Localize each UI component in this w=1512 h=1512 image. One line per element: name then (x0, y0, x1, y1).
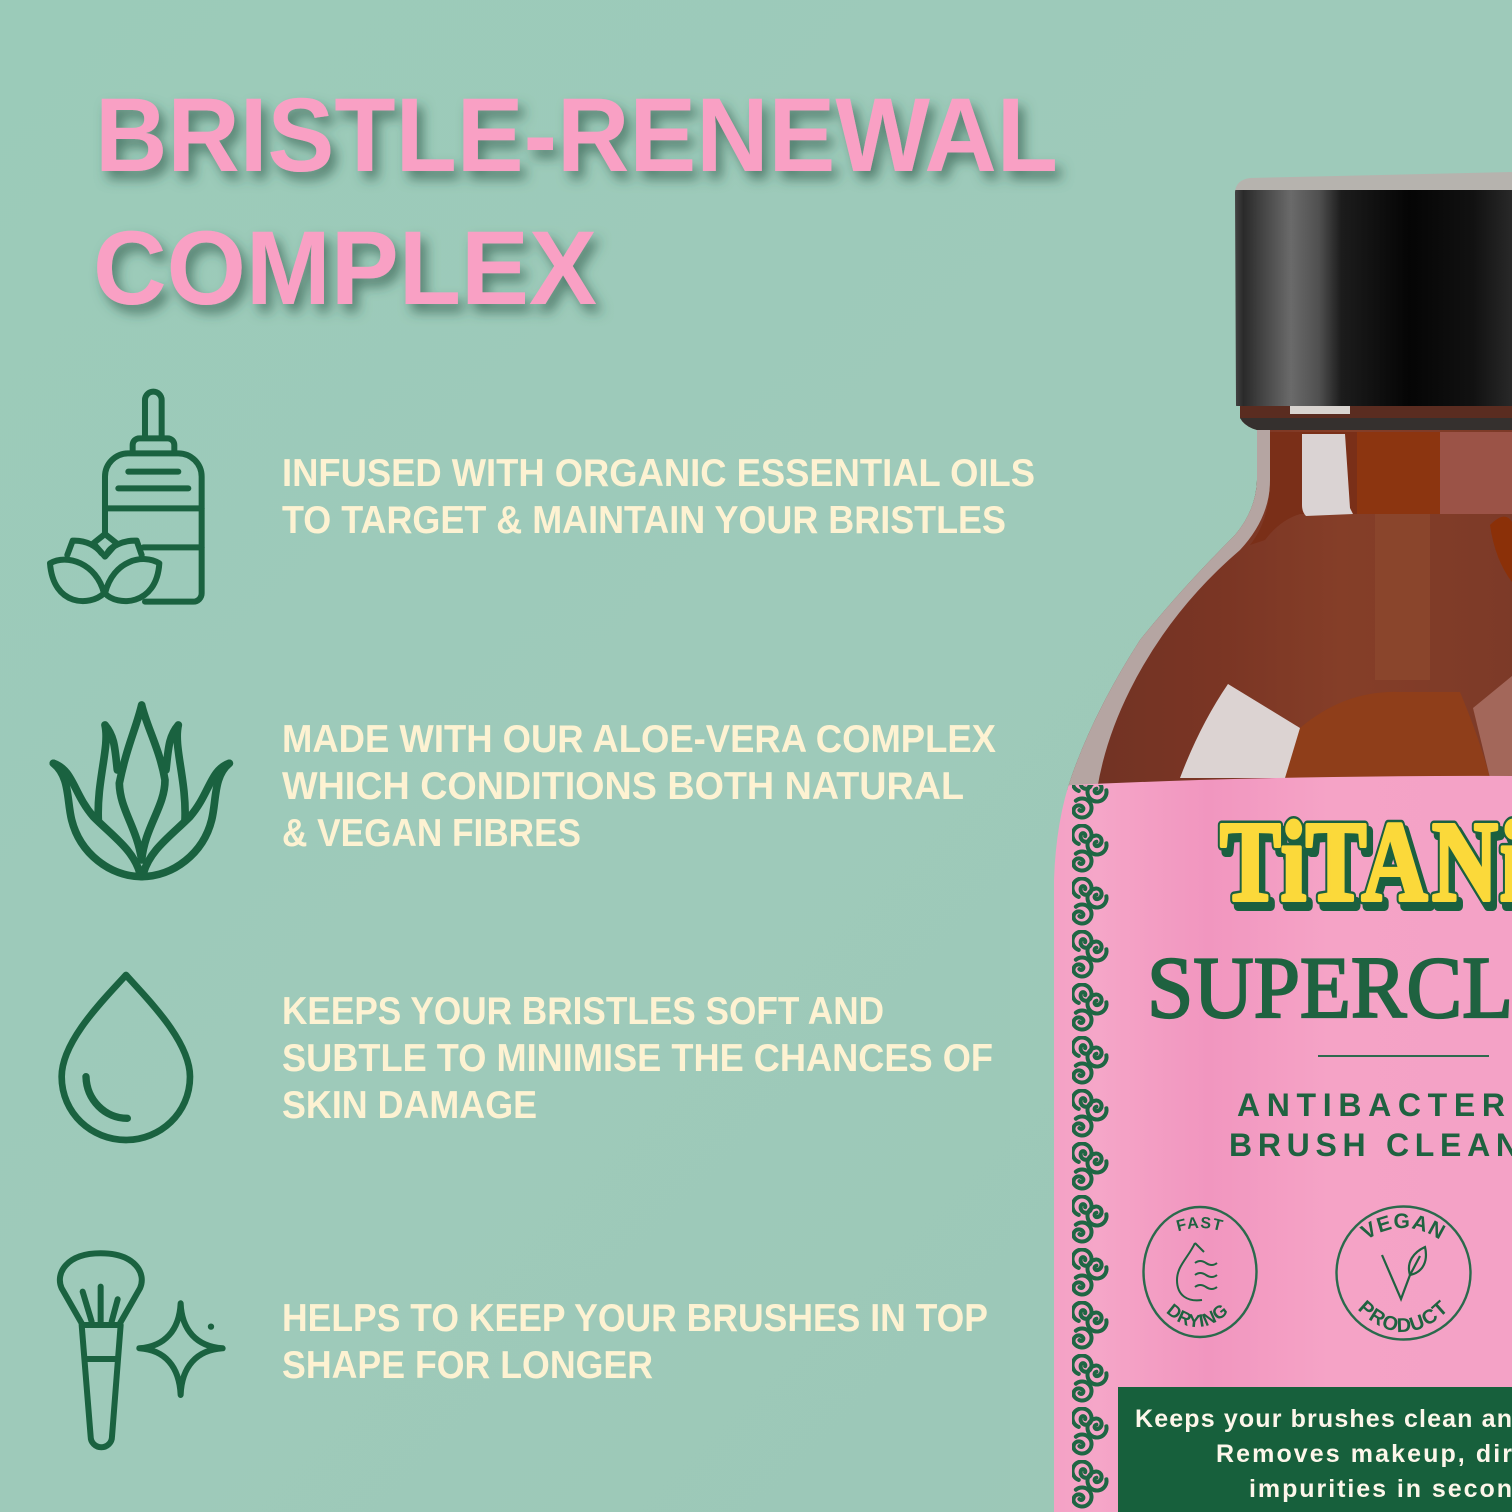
title (93, 77, 1058, 327)
badge: vegan product: PRODUCT (1358, 1300, 1446, 1332)
product descriptor: BRUSH CLEAN (1229, 1127, 1512, 1163)
badge: vegan product (1335, 1205, 1472, 1341)
icon: water drop (62, 975, 190, 1140)
title: COMPLEX (93, 210, 597, 327)
text: soft bristles: SKIN DAMAGE (282, 1084, 537, 1127)
product descriptor: ANTIBACTER (1237, 1087, 1505, 1123)
text: soft bristles (282, 990, 993, 1127)
green claim box: Removes makeup, dir (1216, 1440, 1512, 1468)
text: brush shape: HELPS TO KEEP YOUR BRUSHES IN TOP (282, 1297, 988, 1340)
title: BRISTLE-RENEWAL (95, 77, 1058, 194)
icon: aloe vera (53, 705, 229, 877)
icon: makeup brush with sparkle (60, 1253, 223, 1447)
text: aloe vera: MADE WITH OUR ALOE-VERA COMPLEX (282, 718, 996, 761)
green claim box (1118, 1387, 1512, 1512)
badge: vegan product: VEGAN (1359, 1213, 1446, 1239)
text: essential oils (282, 452, 1035, 542)
text: brush shape (282, 1297, 988, 1387)
green claim box: impurities in secon (1249, 1475, 1512, 1503)
text: soft bristles: SUBTLE TO MINIMISE THE CHANCES OF (282, 1037, 993, 1080)
text: brush shape: SHAPE FOR LONGER (282, 1344, 653, 1387)
badge: fast drying (1142, 1206, 1258, 1338)
text: essential oils: TO TARGET & MAINTAIN YOUR BRISTLES (282, 499, 1006, 542)
green claim box: Keeps your brushes clean an (1135, 1405, 1512, 1433)
amber glass (1050, 420, 1512, 790)
label (1054, 776, 1512, 1512)
text: essential oils: INFUSED WITH ORGANIC ESSENTIAL OILS (282, 452, 1035, 495)
text: aloe vera: & VEGAN FIBRES (282, 812, 581, 855)
text: aloe vera: WHICH CONDITIONS BOTH NATURAL (282, 765, 964, 808)
icon: essential oil bottle with lotus (50, 392, 202, 602)
badge: fast drying: FAST (1176, 1217, 1224, 1232)
text: soft bristles: KEEPS YOUR BRISTLES SOFT AND (282, 990, 884, 1033)
text: aloe vera (282, 718, 996, 855)
badge: fast drying: DRYING (1166, 1303, 1227, 1327)
product bottle (1054, 172, 1512, 1512)
cap (1230, 170, 1512, 430)
product descriptor (1231, 1093, 1512, 1156)
